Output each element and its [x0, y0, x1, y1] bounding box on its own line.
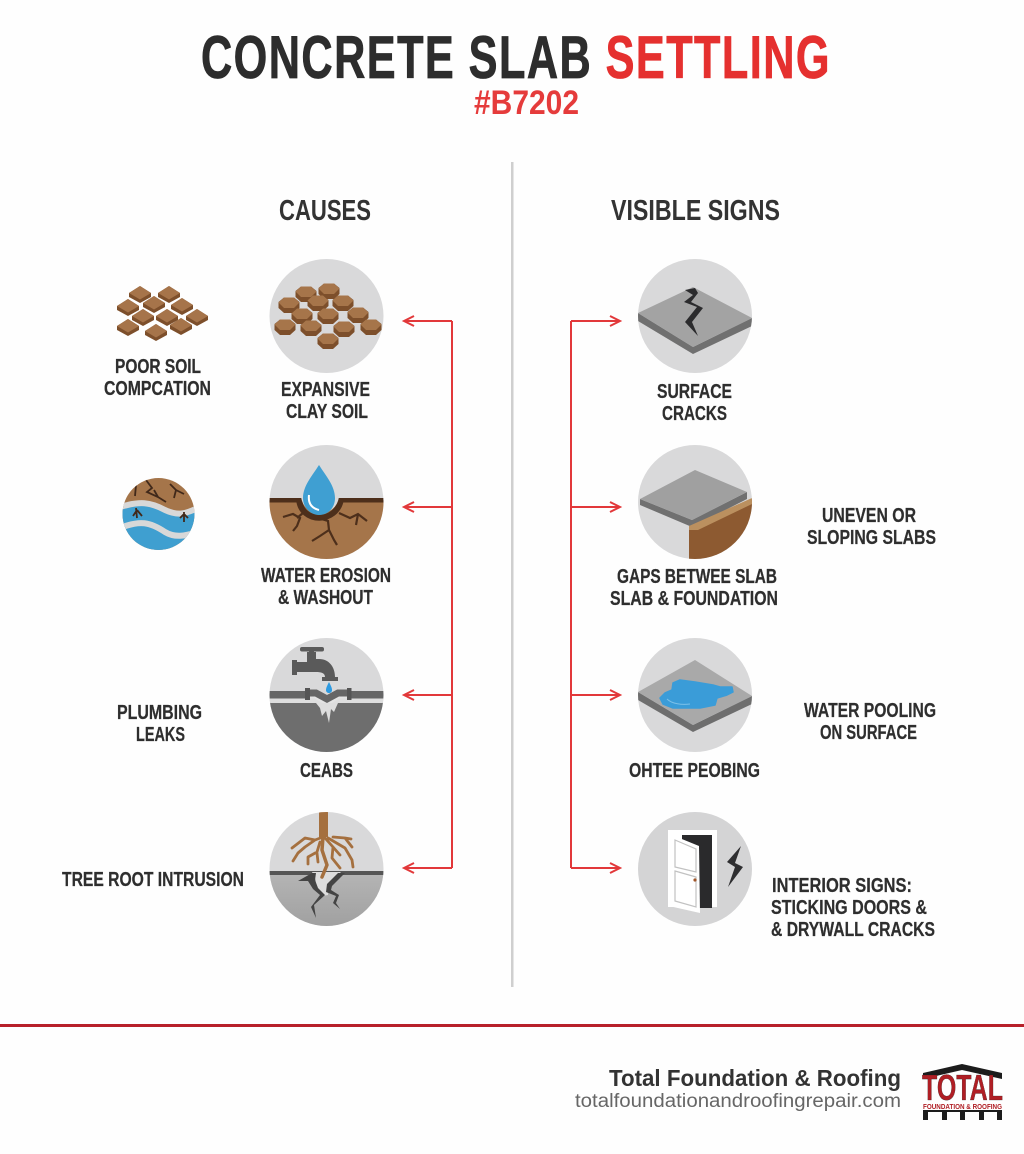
label: interior signs: STICKING DOORS &: [771, 897, 927, 919]
icon: surface cracks: [638, 259, 753, 374]
connector: causes bracket with arrows: [404, 316, 452, 873]
label: water erosion: & WASHOUT: [278, 587, 373, 609]
label: ceabs: CEABS: [300, 760, 353, 782]
icon: expansive clay soil: [270, 259, 384, 373]
label: expansive clay soil: [281, 379, 370, 423]
label: expansive clay soil: CLAY SOIL: [286, 401, 368, 423]
label: gaps between slab and foundation: [610, 566, 778, 610]
heading: visible signs: VISIBLE SIGNS: [611, 195, 780, 227]
label: water pooling: [804, 700, 936, 744]
footer company name: Total Foundation & Roofing: [609, 1065, 901, 1091]
center divider: [511, 162, 514, 987]
label: expansive clay soil: EXPANSIVE: [281, 379, 370, 401]
icon: plumbing leak: [269, 638, 384, 754]
label: uneven or sloping slabs: UNEVEN OR: [822, 505, 916, 527]
logo: [922, 1064, 1003, 1120]
label: water erosion: WATER EROSION: [261, 565, 391, 587]
subtitle: #B7202: [474, 84, 579, 122]
label: gaps between slab and foundation: SLAB & FOUNDATION: [610, 588, 778, 610]
label: poor soil compaction: [104, 356, 211, 400]
label: uneven or sloping slabs: SLOPING SLABS: [807, 527, 936, 549]
icon: small water erosion circle: [122, 478, 194, 550]
icon: gaps between slab and foundation: [638, 445, 753, 560]
label: poor soil compaction: POOR SOIL: [115, 356, 201, 378]
label: surface cracks: SURFACE: [657, 381, 732, 403]
label: water erosion: [261, 565, 391, 609]
label: water pooling: ON SURFACE: [820, 722, 917, 744]
label: ohtee peobing: OHTEE PEOBING: [629, 760, 760, 782]
icon: water pooling: [638, 638, 753, 753]
label: surface cracks: CRACKS: [662, 403, 727, 425]
footer url: totalfoundationandroofingrepair.com: [575, 1091, 901, 1112]
label: interior signs: INTERIOR SIGNS:: [772, 875, 912, 897]
label: interior signs: [771, 875, 935, 941]
heading: causes: CAUSES: [279, 195, 371, 227]
icon: tree root: [269, 812, 384, 927]
label: plumbing leaks: PLUMBING: [117, 702, 202, 724]
logo: FOUNDATION & ROOFING: [923, 1102, 1002, 1111]
label: tree root intrusion: TREE ROOT INTRUSION: [62, 869, 244, 891]
icon: poor soil compaction tiles: [117, 286, 208, 341]
label: uneven or sloping slabs: [807, 505, 936, 549]
connector: signs bracket with arrows: [571, 316, 620, 873]
label: surface cracks: [657, 381, 732, 425]
icon: sticking door: [638, 812, 753, 927]
label: water pooling: WATER POOLING: [804, 700, 936, 722]
label: gaps between slab and foundation: GAPS BETWEE SLAB: [617, 566, 777, 588]
title: CONCRETE SLAB SETTLING: [201, 24, 831, 91]
label: plumbing leaks: [117, 702, 202, 746]
label: plumbing leaks: LEAKS: [136, 724, 185, 746]
label: interior signs: & DRYWALL CRACKS: [771, 919, 935, 941]
footer rule: [0, 1024, 1024, 1027]
icon: water erosion: [269, 445, 384, 560]
label: poor soil compaction: COMPCATION: [104, 378, 211, 400]
